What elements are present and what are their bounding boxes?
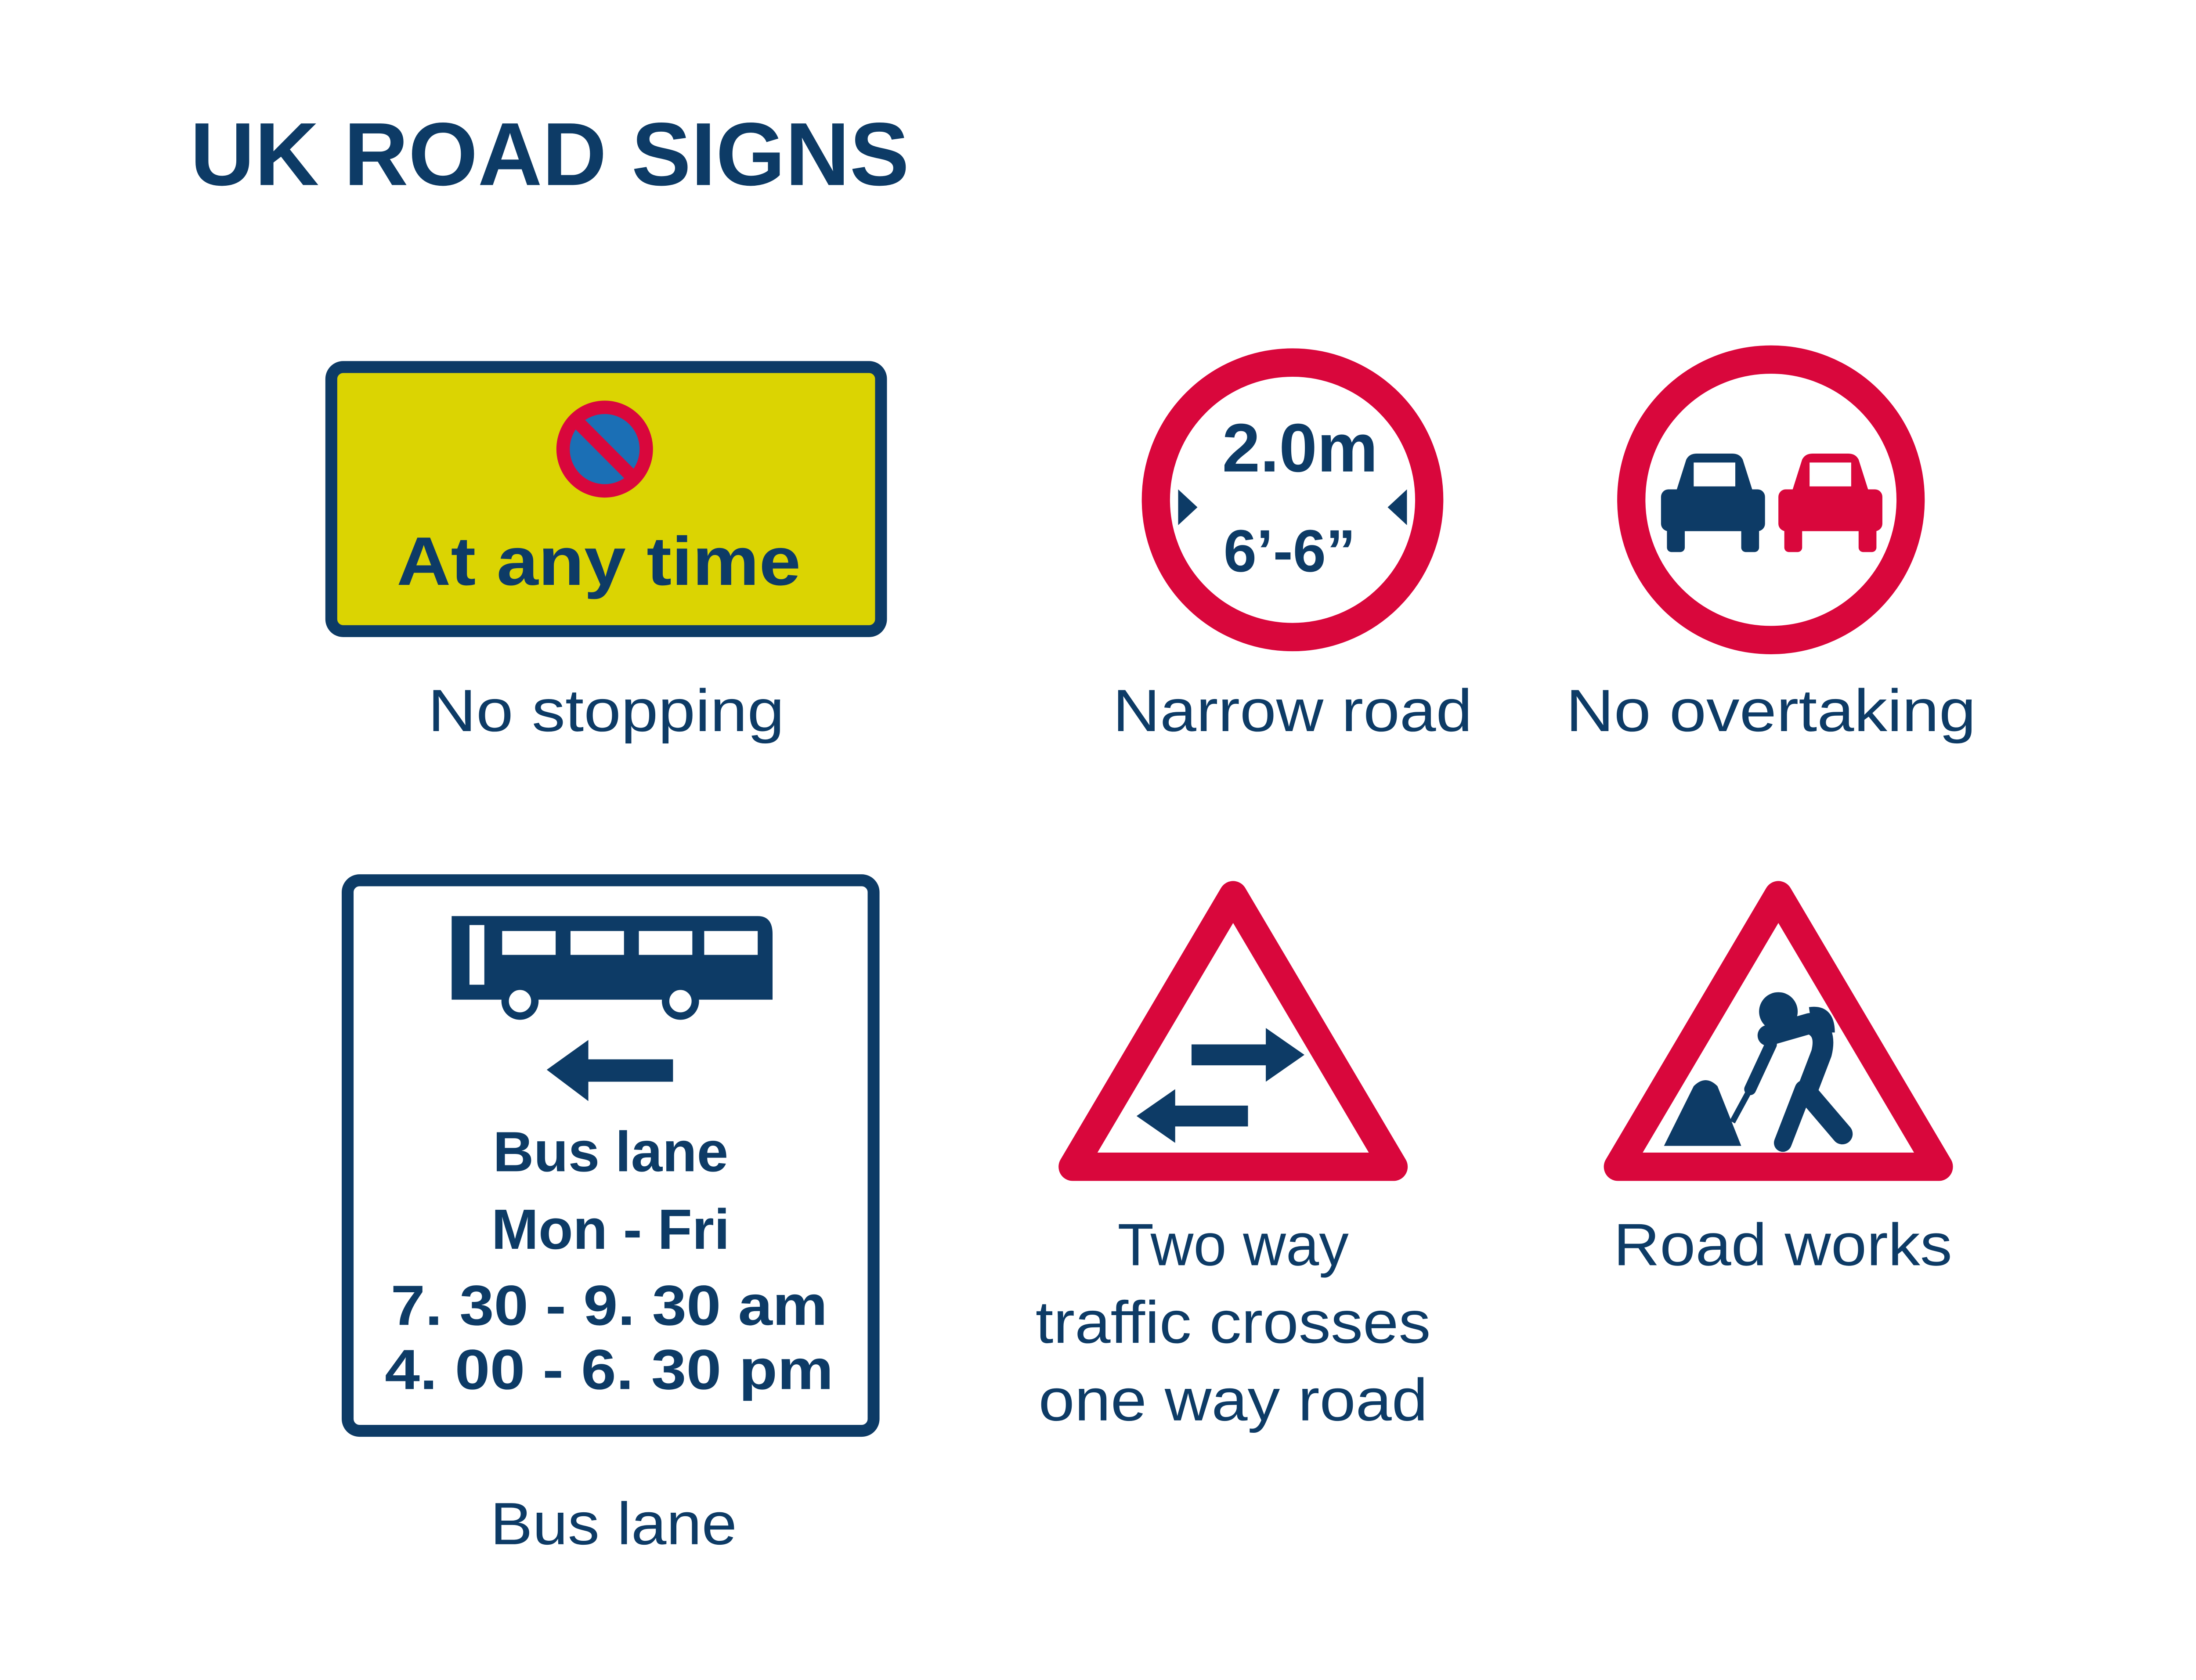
sign: no stopping <box>331 367 881 631</box>
label: road works: Road works <box>1614 1211 1952 1278</box>
sign: narrow road <box>1156 363 1429 637</box>
arrow: left <box>547 1040 673 1101</box>
sign text: Bus lane <box>493 1120 728 1183</box>
label: two way traffic: traffic crosses <box>1036 1289 1431 1356</box>
arrow: left <box>1137 1089 1248 1143</box>
arrow: right <box>1192 1028 1304 1082</box>
icon: worker <box>1664 992 1842 1146</box>
label: two way traffic: Two way <box>1117 1211 1349 1278</box>
label: narrow road: Narrow road <box>1113 677 1472 744</box>
sign text: 7. 30 - 9. 30 am <box>391 1274 827 1337</box>
label: two way traffic: one way road <box>1039 1366 1428 1433</box>
sign text: At any time <box>397 523 801 600</box>
sign: road works <box>1618 895 1939 1167</box>
icon: bus <box>451 916 773 1016</box>
title: UK ROAD SIGNS <box>190 105 909 204</box>
icon: red car <box>1778 454 1882 552</box>
sign: bus lane <box>348 880 874 1431</box>
icon: no stopping roundel <box>563 407 646 491</box>
sign: narrow road: 2.0m <box>1222 410 1378 487</box>
sign: narrow road: 6’-6” <box>1224 517 1356 584</box>
icon: navy car <box>1661 454 1765 552</box>
label: bus lane: Bus lane <box>490 1490 737 1557</box>
sign text: Mon - Fri <box>491 1198 730 1261</box>
sign text: 4. 00 - 6. 30 pm <box>385 1338 834 1401</box>
label: two way traffic <box>1036 1211 1431 1433</box>
sign text <box>385 1120 834 1401</box>
sign: two way traffic <box>1073 895 1394 1167</box>
label: no stopping: No stopping <box>428 677 784 744</box>
sign: no overtaking <box>1631 360 1911 640</box>
label: no overtaking: No overtaking <box>1566 677 1976 744</box>
